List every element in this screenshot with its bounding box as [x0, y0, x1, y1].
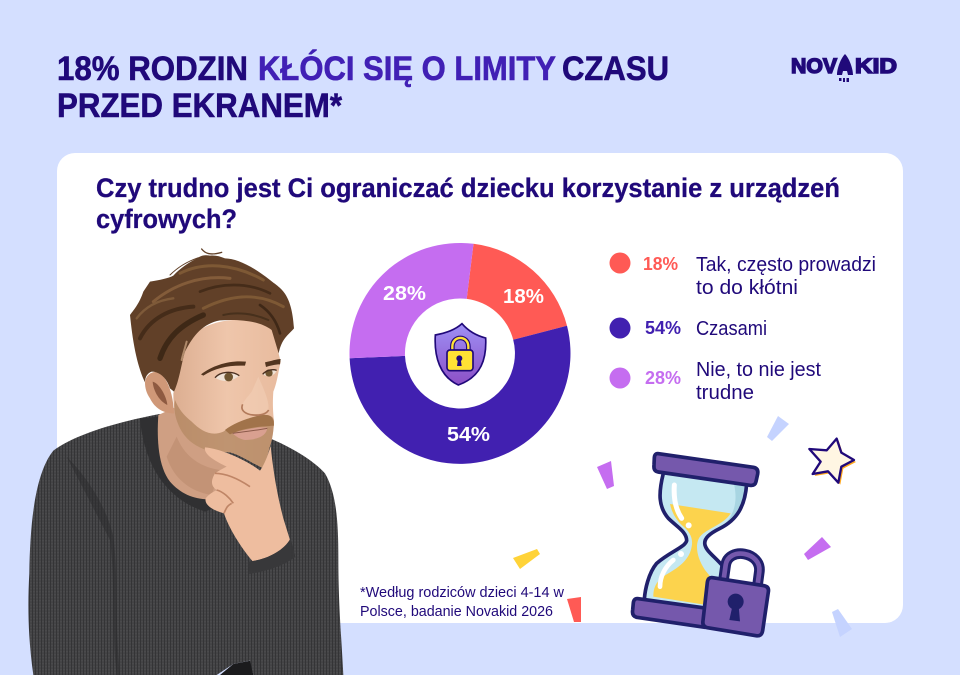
legend item: 28%: Nie, to nie jest — [696, 359, 821, 381]
ear — [145, 372, 174, 413]
segment: 18% — [467, 244, 567, 340]
legend item: 18%: 18% — [643, 254, 678, 274]
left eye — [215, 372, 239, 381]
donut labels: 54% — [447, 423, 490, 446]
mouth — [233, 427, 267, 440]
hair strands — [137, 249, 283, 360]
shackle — [723, 554, 759, 587]
neck — [158, 407, 233, 499]
sand — [653, 504, 731, 605]
title: CZASU — [562, 50, 669, 88]
segment: 54% — [350, 326, 570, 464]
logo: Novakid: KID — [855, 55, 897, 78]
legend item: 18%: Tak, często prowadzi — [696, 254, 876, 276]
donut chart — [349, 243, 570, 464]
question heading: Czy trudno jest Ci ograniczać dziecku korzystanie z urządzeń — [96, 173, 840, 203]
sleeve shading — [67, 457, 120, 675]
legend item: 28% — [610, 359, 821, 404]
right eye — [263, 370, 277, 376]
footnote: *Według rodziców dzieci 4-14 w — [360, 585, 565, 601]
legend item: 54%: 54% — [645, 318, 681, 338]
padlock body — [703, 578, 768, 636]
segment: 28% — [349, 243, 474, 358]
hand — [205, 446, 290, 562]
photo: thoughtful man — [28, 249, 343, 675]
nose — [242, 377, 269, 414]
donut labels: 18% — [503, 285, 544, 308]
eyebrows — [201, 361, 246, 376]
bottom bar — [632, 599, 710, 627]
glass outline — [644, 473, 747, 599]
hair — [130, 255, 294, 392]
glass — [644, 473, 747, 609]
confetti — [513, 416, 852, 637]
head — [130, 249, 294, 468]
title: PRZED EKRANEM* — [57, 87, 343, 125]
legend item: 28%: 28% — [645, 368, 681, 388]
mustache — [225, 415, 274, 434]
pants — [220, 661, 253, 675]
keyhole — [728, 594, 744, 610]
panel: survey card — [57, 153, 903, 623]
legend item: 28%: trudne — [696, 382, 754, 404]
beard — [174, 400, 274, 468]
highlights — [674, 485, 682, 518]
question heading — [96, 173, 840, 234]
glass shade — [722, 484, 747, 527]
donut labels: 28% — [383, 282, 426, 305]
legend item: 54%: Czasami — [696, 318, 767, 340]
logo: Novakid: NOV — [791, 55, 837, 78]
icon: shield with padlock — [435, 324, 486, 385]
question heading: cyfrowych? — [96, 204, 237, 234]
finger creases — [215, 473, 250, 513]
footnote — [360, 585, 565, 620]
top bar — [654, 454, 758, 485]
footnote: Polsce, badanie Novakid 2026 — [360, 604, 553, 620]
title: 18% RODZIN — [57, 50, 248, 88]
collar — [140, 417, 227, 512]
legend item: 54% — [610, 318, 767, 340]
title: KŁÓCI SIĘ O LIMITY — [258, 50, 556, 88]
legend — [610, 252, 876, 404]
donut labels — [383, 282, 544, 446]
sweater — [28, 414, 343, 675]
icon: hourglass with padlock — [632, 454, 768, 636]
icon: star — [809, 439, 856, 485]
legend item: 18% — [610, 252, 876, 299]
logo: Novakid — [791, 54, 897, 82]
legend item: 18%: to do kłótni — [696, 277, 798, 299]
title — [57, 50, 669, 125]
face — [173, 320, 281, 468]
sleeve cuff — [248, 538, 342, 675]
